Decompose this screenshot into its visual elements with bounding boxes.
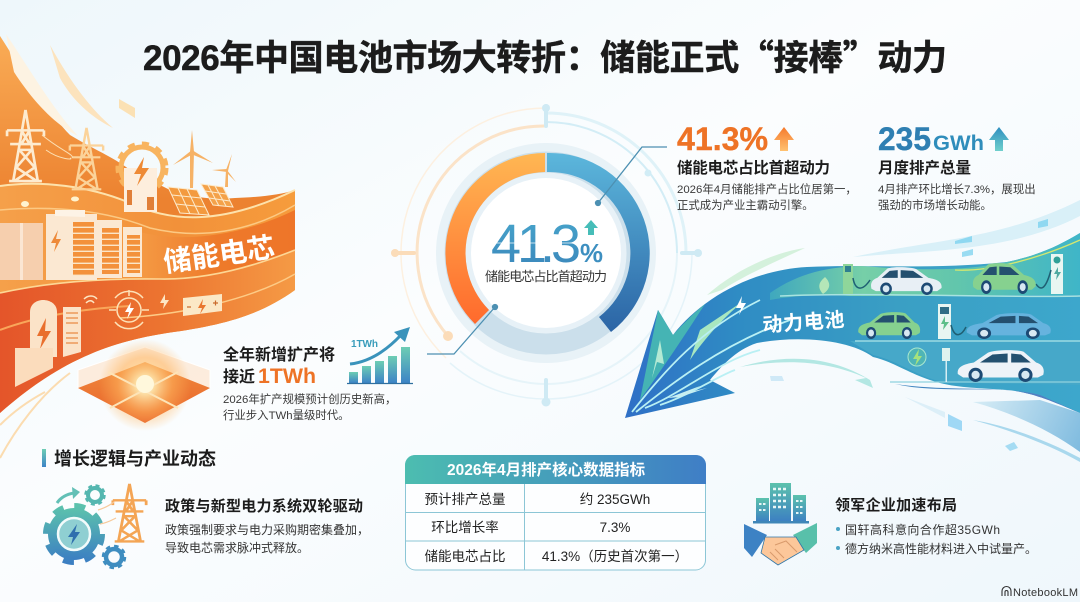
- stat: 1TWh: 接近: [223, 368, 255, 386]
- icon: gear with building: [118, 144, 166, 212]
- blue ribbon: power battery: [625, 200, 1080, 462]
- text block: leading companies: 德方纳米高性能材料进入中试量产。: [845, 541, 1037, 556]
- stat description: 2026年4月储能排产占比位居第一，: [677, 182, 857, 196]
- stat: 41.3%: [677, 121, 857, 212]
- data table: 约 235GWh: [580, 492, 650, 507]
- stat: 1TWh: 行业步入TWh量级时代。: [223, 409, 350, 422]
- text block: policy: 政策与新型电力系统双轮驱动: [165, 497, 363, 515]
- icon: solar panels: [168, 184, 233, 215]
- data table: 预计排产总量: [424, 492, 506, 507]
- donut value: 41.3: [491, 214, 581, 274]
- text block: leading companies: 国轩高科意向合作超35GWh: [845, 522, 1000, 537]
- stat: 235GWh: 235: [878, 121, 931, 157]
- text block: policy: [165, 497, 369, 555]
- text block: policy: 导致电芯需求脉冲式释放。: [165, 540, 309, 555]
- decorative rings: [401, 108, 692, 399]
- icon: wifi: [84, 296, 97, 303]
- icon: glowing battery chip: [78, 339, 210, 431]
- icon: battery: [183, 294, 222, 316]
- icon: bolt circle: [109, 290, 149, 329]
- icon: battery cabinets: [0, 210, 142, 280]
- bar chart: 1TWh growth: 1TWh: [351, 339, 378, 350]
- cream swoosh lines: [0, 373, 70, 458]
- donut segment: orange: [445, 153, 545, 324]
- bar chart: 1TWh growth: [347, 327, 413, 384]
- data table: 储能电芯占比: [424, 549, 506, 564]
- data table: 2026年4月排产核心数据指标: [447, 460, 646, 479]
- donut caption: 储能电芯占比首超动力: [485, 269, 607, 284]
- text block: leading companies: [835, 496, 1037, 556]
- orange ribbon: energy storage: [0, 34, 295, 413]
- data table: [405, 455, 706, 570]
- connector: bottom left: [427, 304, 498, 354]
- text block: policy: 政策强制要求与电力采购期密集叠加，: [165, 522, 369, 537]
- data table: 41.3%（历史首次第一）: [542, 548, 688, 564]
- icon: blue up arrow: [989, 127, 1009, 151]
- data table: 7.3%: [600, 520, 630, 535]
- icon: small bolt: [160, 294, 169, 309]
- text block: leading companies: 领军企业加速布局: [835, 496, 957, 514]
- icons: electric cars: [858, 263, 1051, 382]
- icon: bolt badge: [908, 348, 926, 366]
- decorative shards: [770, 219, 1048, 451]
- stat: 1TWh: [223, 345, 396, 422]
- stat: 41.3%: 正式成为产业主霸动引擎。: [677, 198, 814, 212]
- ribbon label: 储能电芯: [162, 232, 277, 278]
- donut chart: [436, 143, 656, 363]
- stat label: 月度排产总量: [878, 158, 971, 177]
- ribbon label: 动力电池: [762, 308, 845, 337]
- icon: charging stations: [843, 254, 1063, 382]
- icon: wind turbines: [173, 130, 236, 188]
- stat: 235GWh: 强劲的市场增长动能。: [878, 198, 992, 212]
- donut segment: blue: [547, 153, 650, 332]
- stat: 235GWh: [878, 121, 1036, 212]
- icon: orange up arrow: [774, 127, 794, 151]
- stat description: 2026年扩产规模预计创历史新高，: [223, 392, 396, 406]
- icon: gears and pylon: [46, 484, 146, 568]
- watermark: NotebookLM: [1013, 587, 1078, 599]
- donut value: %: [580, 238, 603, 268]
- connector: top right: [596, 147, 667, 206]
- icon: storage tank and rack: [15, 300, 81, 387]
- stat: 41.3%: 41.3%: [677, 121, 768, 157]
- data table: 环比增长率: [431, 519, 499, 535]
- icon: pylons: [7, 110, 103, 189]
- stat description: 4月排产环比增长7.3%，展现出: [878, 182, 1036, 196]
- stat: 235GWh: GWh: [933, 132, 984, 155]
- icon: handshake and buildings: [744, 483, 817, 565]
- title: 2026年中国电池市场大转折：储能正式“接棒”动力: [143, 30, 947, 81]
- icon: leaf: [819, 277, 829, 294]
- stat: 1TWh: 全年新增扩产将: [223, 345, 335, 364]
- stat label: 储能电芯占比首超动力: [677, 158, 830, 177]
- ring ticks: [391, 104, 702, 406]
- stat: 1TWh: 1TWh: [258, 365, 316, 388]
- section heading: 增长逻辑与产业动态: [54, 448, 216, 469]
